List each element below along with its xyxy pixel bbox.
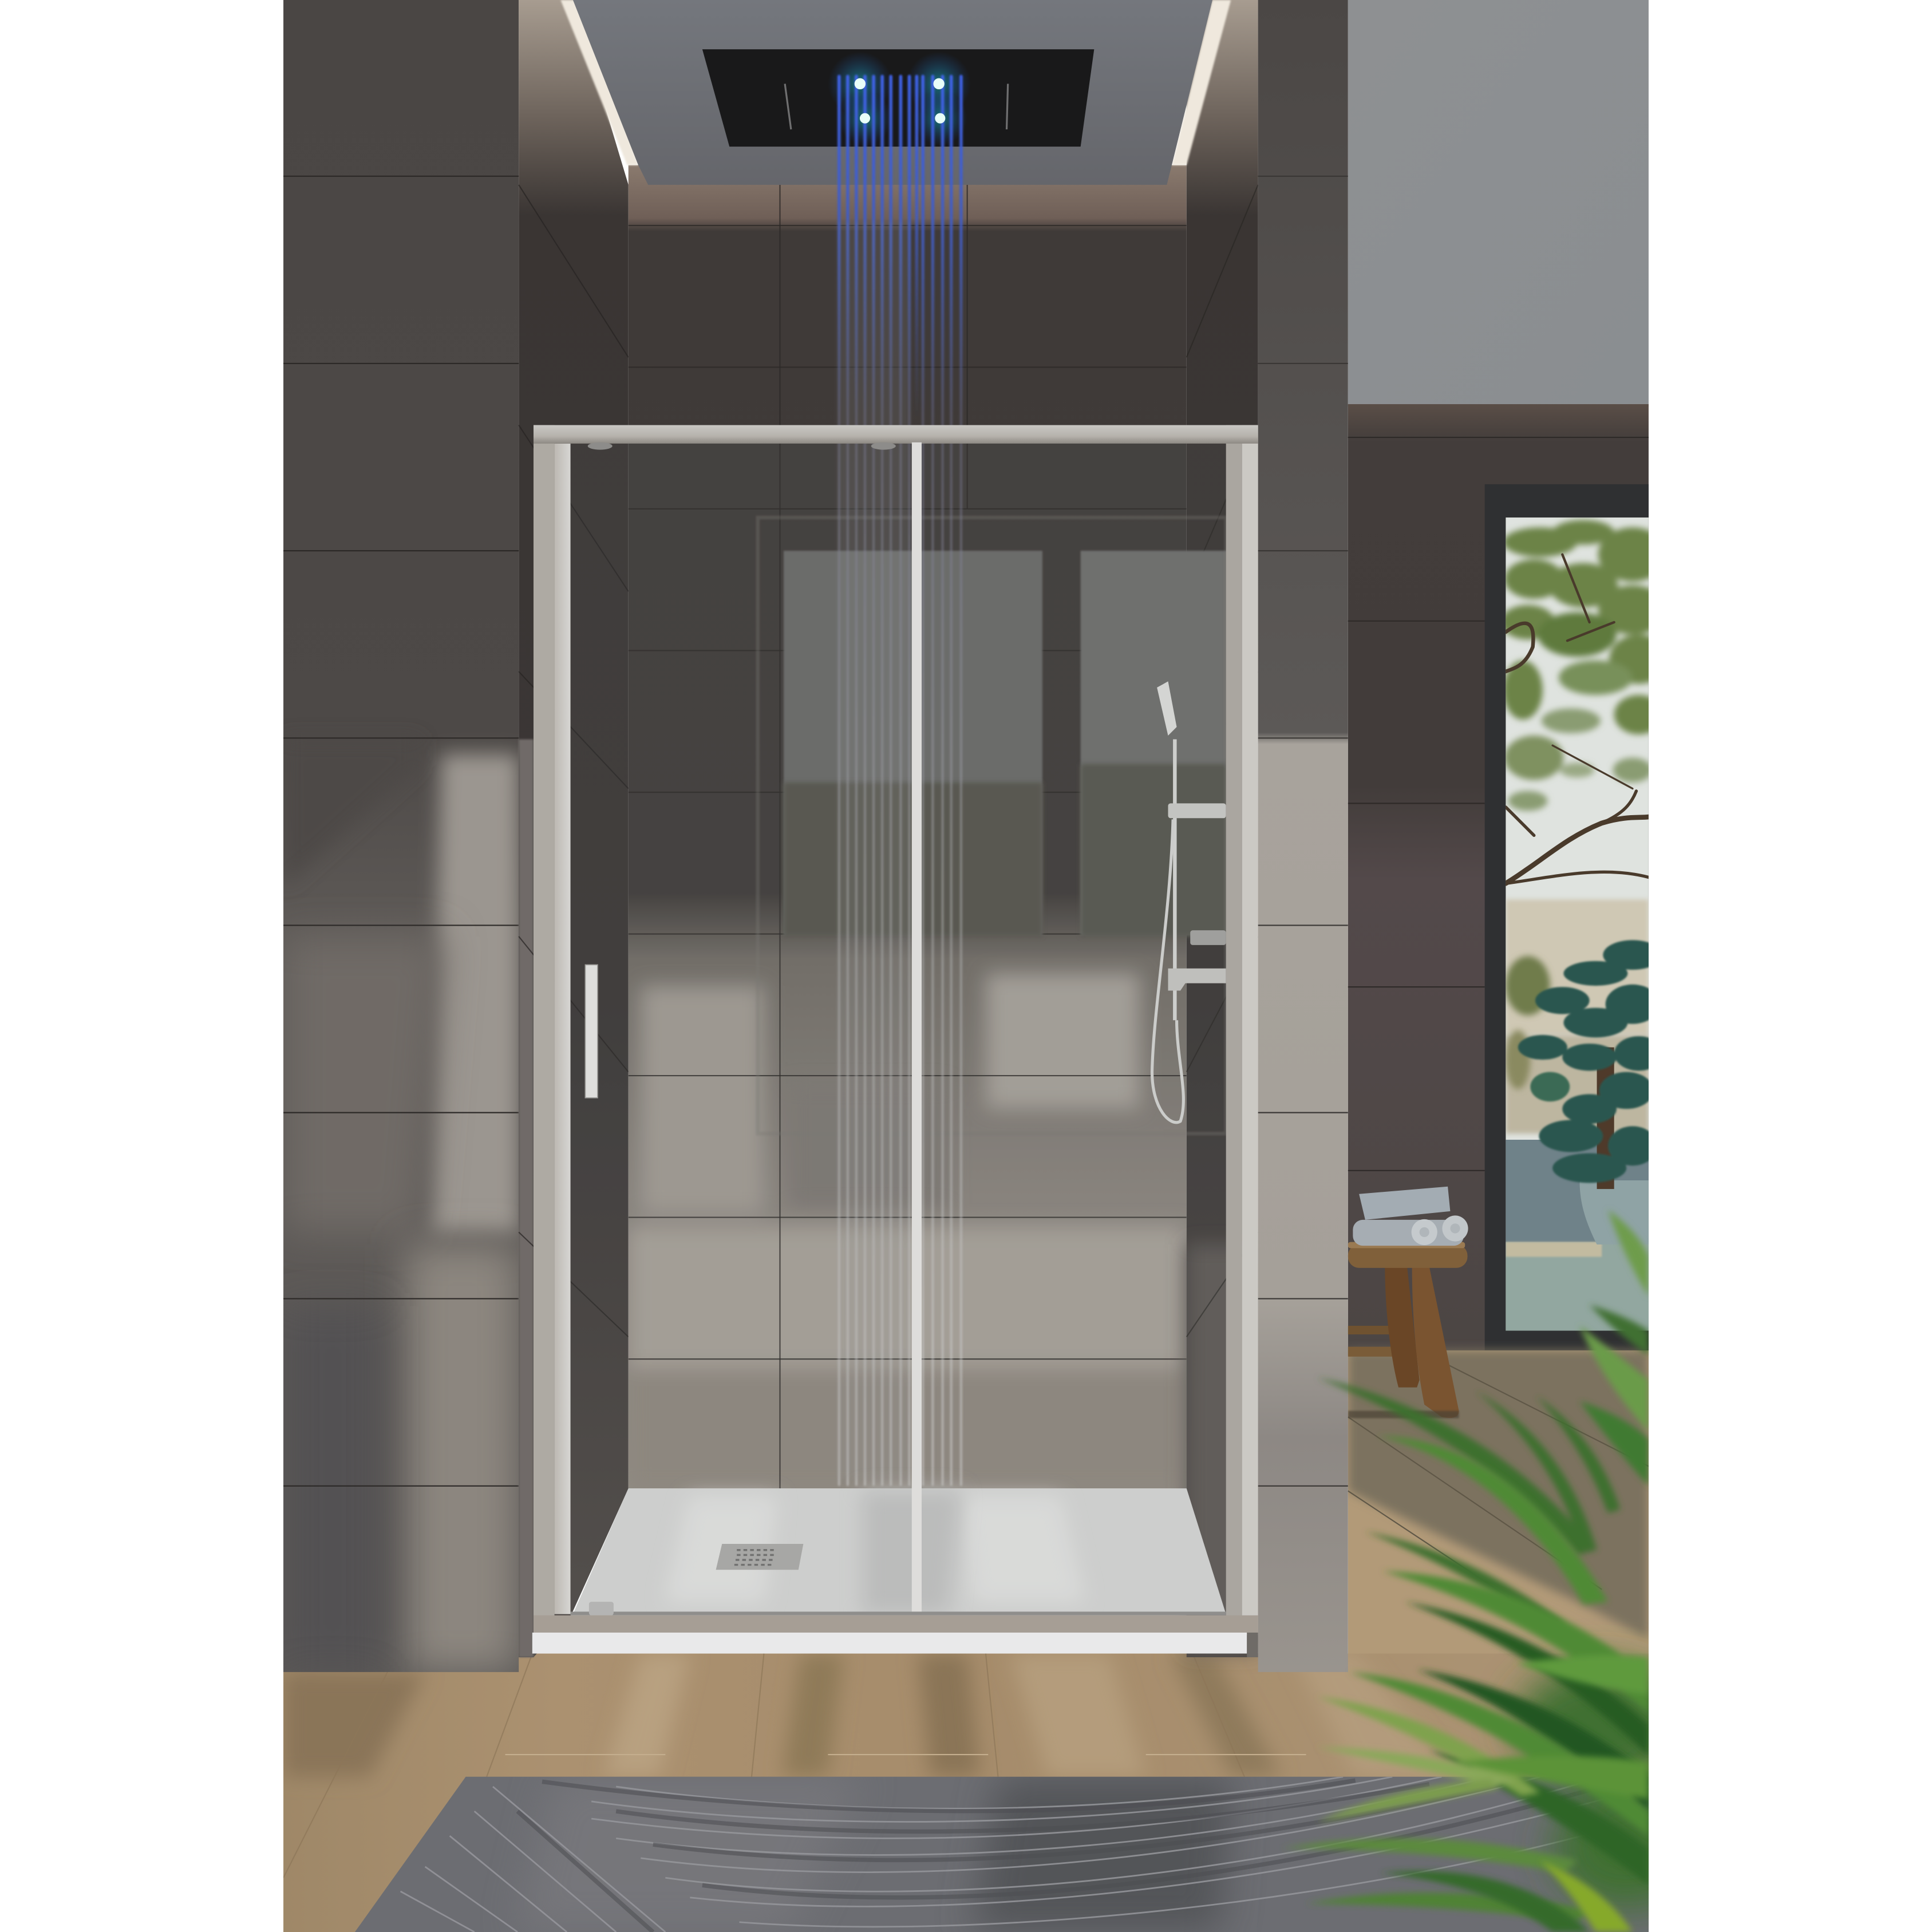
- valve and mixer: [1190, 930, 1226, 945]
- shower tray: [573, 1488, 1226, 1614]
- niche back wall: [629, 165, 1187, 1491]
- niche right side wall: [1187, 0, 1258, 1657]
- light strips: [560, 0, 638, 165]
- bottom guide: [571, 1611, 1226, 1615]
- towels on stool: [1348, 1187, 1468, 1418]
- main front blades: [1317, 1210, 1649, 1932]
- right wall profile: [1226, 425, 1242, 1635]
- window frame: [1485, 484, 1649, 1350]
- potted monstera: [1518, 940, 1664, 1244]
- rain shower head: [702, 49, 1094, 147]
- threshold: [532, 1633, 1247, 1654]
- sunlight patches on back wall: [629, 973, 1187, 1491]
- side slots: [785, 84, 1008, 129]
- outdoor view: [1501, 517, 1668, 1331]
- rain water streams: [839, 76, 961, 1485]
- dense foliage mass: [1515, 1664, 1700, 1910]
- sunlight on left wall: [283, 739, 519, 1672]
- slide rail: [1173, 739, 1177, 1020]
- right floor area: [1348, 1350, 1649, 1673]
- stool: [1348, 1242, 1468, 1418]
- towels: [1353, 1187, 1468, 1246]
- tree branches: [1506, 555, 1649, 883]
- bottom rail: [534, 1615, 1258, 1634]
- glass tint: [571, 444, 1226, 1614]
- scene: shower room photograph: [283, 0, 1649, 1932]
- photograph group: [283, 0, 1700, 1932]
- grey rug: [355, 1777, 1649, 1932]
- LED glow and lights: [828, 52, 971, 145]
- upper right plaster wall: [1348, 0, 1649, 406]
- hand shower set: [1152, 681, 1226, 1123]
- hand shower head: [1157, 681, 1177, 736]
- top rail: [534, 425, 1258, 444]
- foreground plant: [1282, 1210, 1700, 1932]
- front wood floor: [283, 1654, 1649, 1932]
- window with outdoor view: [1485, 484, 1649, 1350]
- niche left side wall: [519, 0, 629, 1657]
- reflected window in glass: [758, 517, 1228, 1133]
- ceiling recess: [560, 0, 1231, 185]
- lower right tiled wall: [1348, 404, 1649, 1356]
- shelf: [1168, 803, 1226, 818]
- door handle: [585, 965, 598, 1098]
- hose: [1152, 819, 1183, 1123]
- sliding door frame: [532, 425, 1258, 1657]
- left tiled wall: [283, 0, 519, 1672]
- floor drain: [716, 1544, 803, 1570]
- LED lights: [855, 78, 945, 124]
- left wall profile: [534, 425, 555, 1635]
- rollers: [588, 442, 613, 450]
- blurred back blades: [1282, 1377, 1649, 1922]
- right threshold end: [1247, 1633, 1258, 1657]
- centre stile: [912, 442, 922, 1617]
- tree canopy: [1501, 520, 1668, 1089]
- right dark-to-light tiled pillar: [1258, 0, 1348, 1672]
